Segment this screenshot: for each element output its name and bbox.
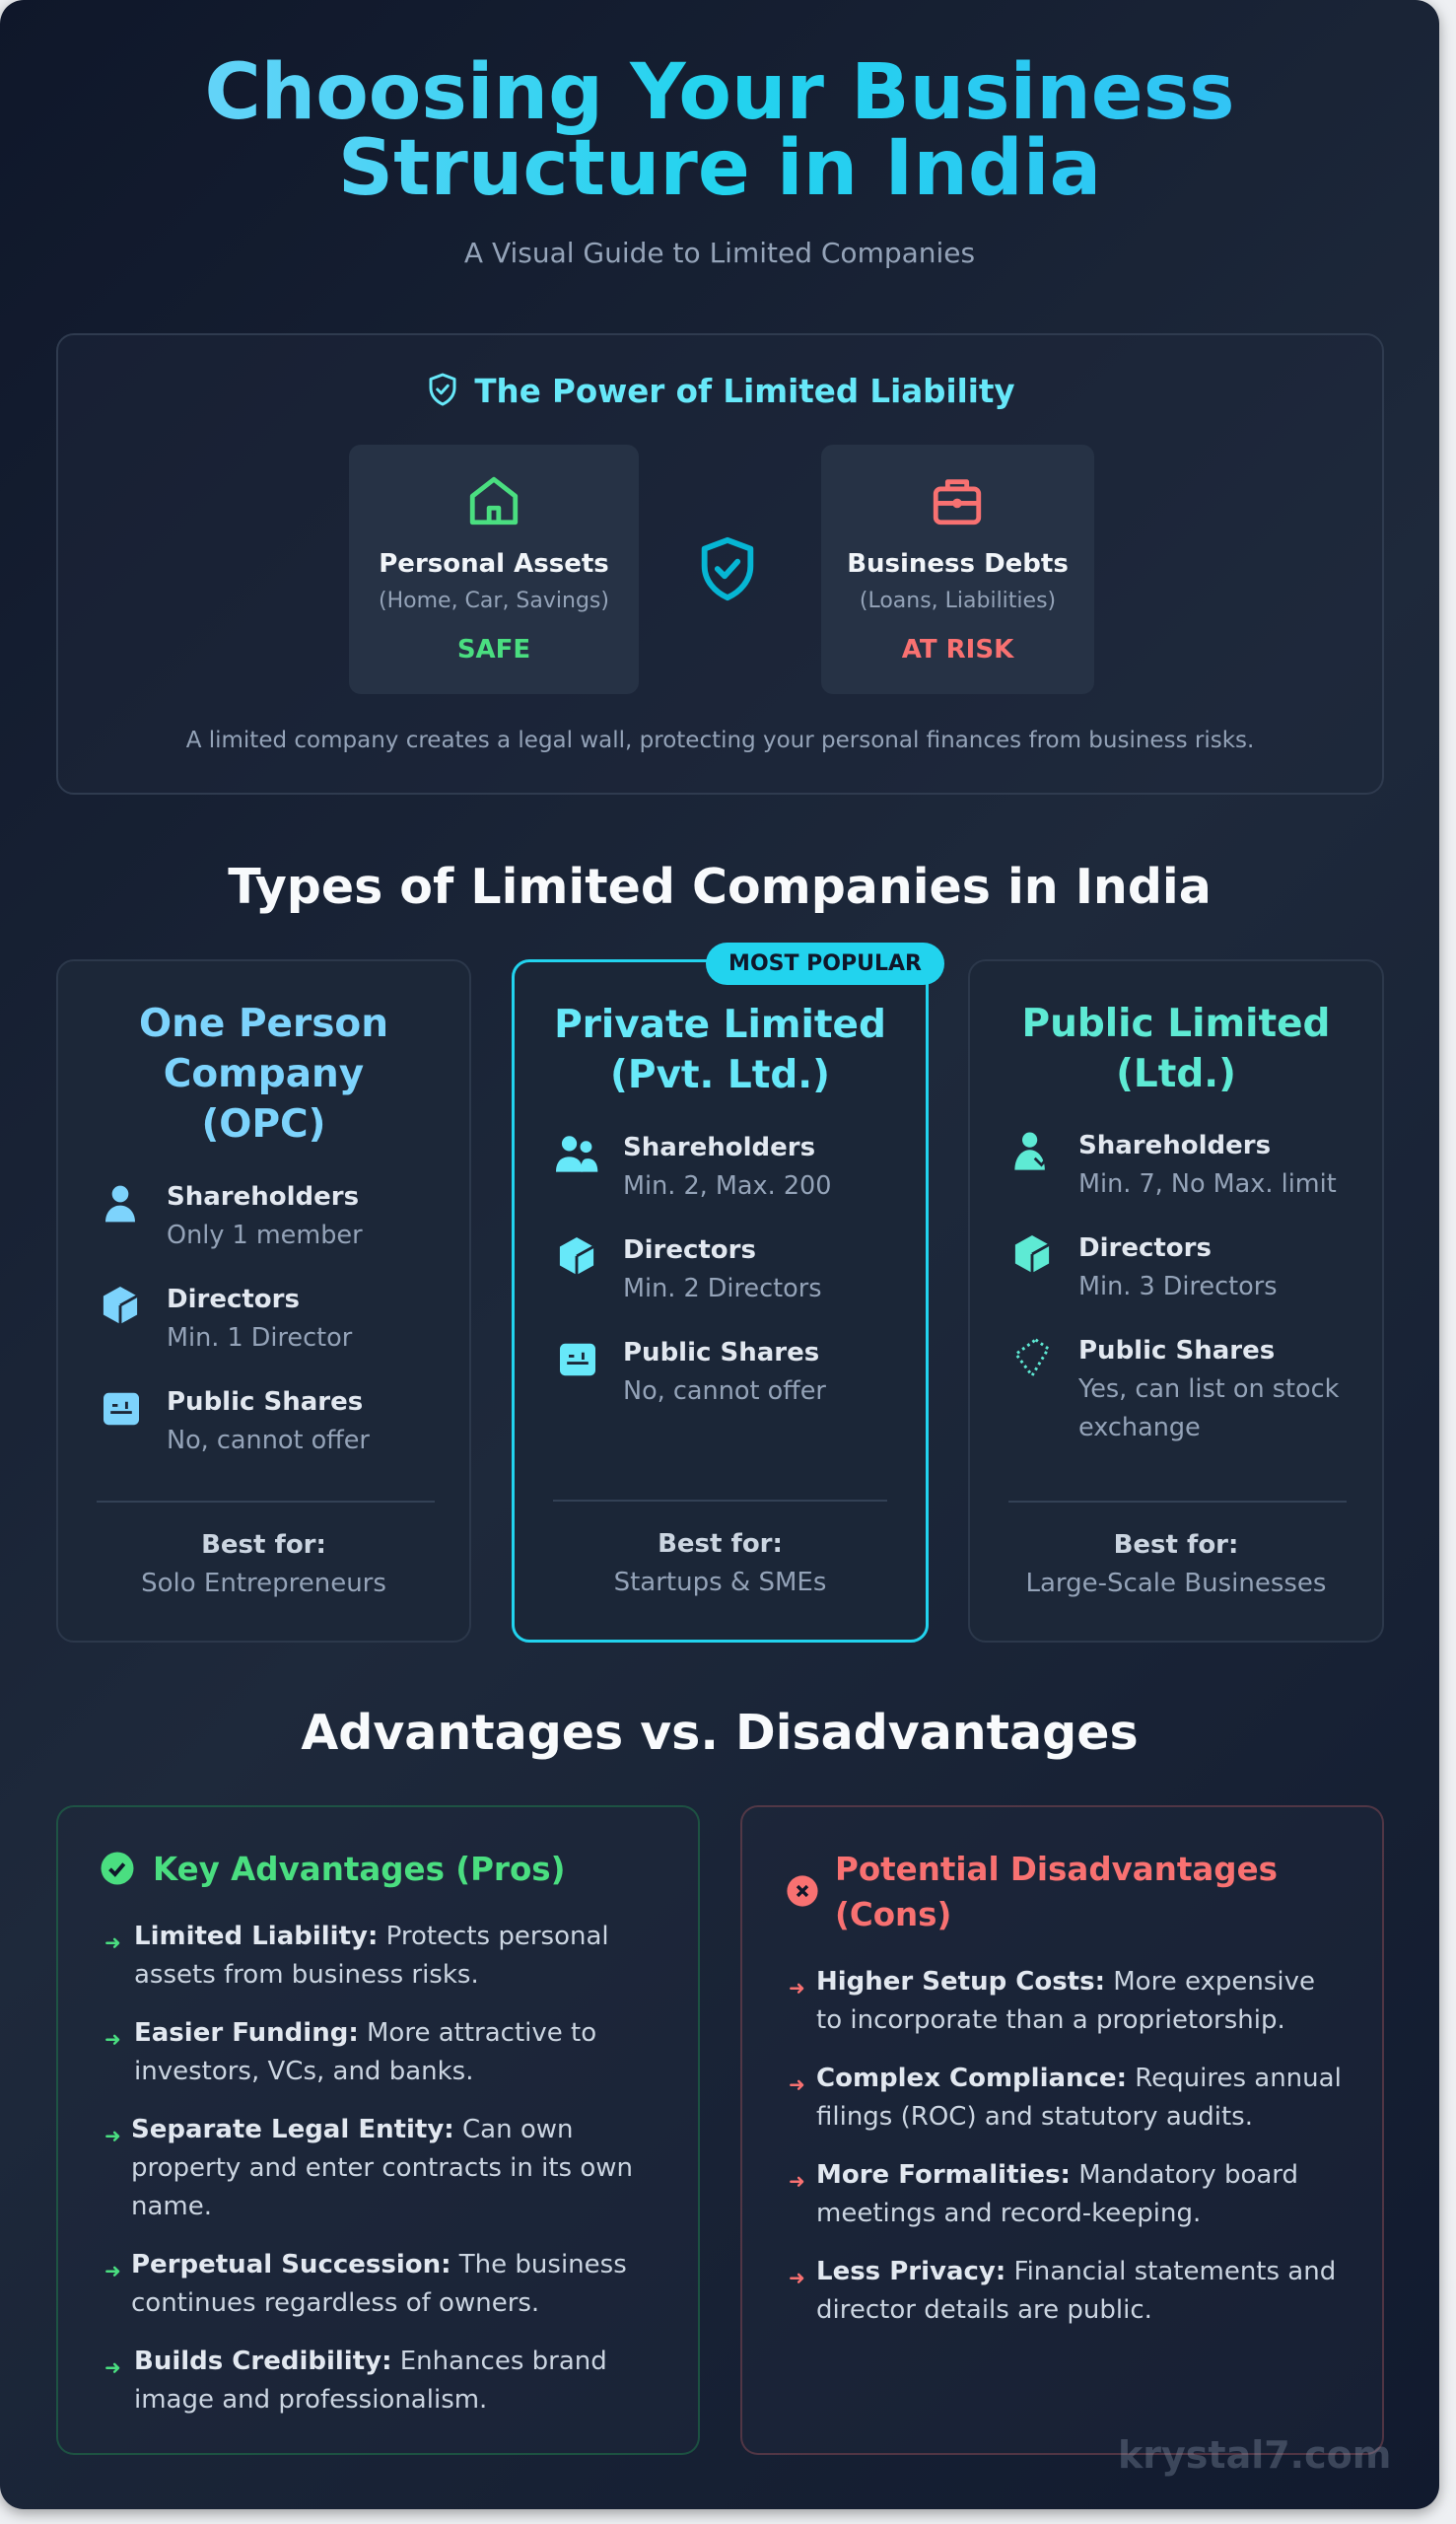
panel: limited liability bbox=[56, 333, 1384, 795]
panel: cons: ➜ bbox=[789, 2266, 805, 2289]
heading: types: Types of Limited Companies in India bbox=[228, 859, 1212, 915]
item: shareholders: Shareholders bbox=[1078, 1131, 1271, 1160]
panel: cons: ➜ bbox=[789, 2072, 805, 2096]
best for: Best for: bbox=[201, 1530, 326, 1560]
heading: pros: Key Advantages (Pros) bbox=[153, 1851, 566, 1888]
icon: briefcase bbox=[933, 479, 982, 525]
panel: pros: ➜ bbox=[104, 2259, 121, 2282]
best for bbox=[141, 1530, 386, 1598]
item: directors: Directors bbox=[1078, 1233, 1212, 1263]
item: directors: Min. 1 Director bbox=[167, 1323, 352, 1353]
title: Structure in India bbox=[338, 124, 1101, 213]
item: shareholders: Only 1 member bbox=[167, 1221, 363, 1250]
item: directors: Min. 2 Directors bbox=[623, 1274, 822, 1303]
caption: A limited company creates a legal wall, protecting your personal finances from business risks. bbox=[186, 728, 1254, 753]
card: Private Limited: Private Limited bbox=[554, 1003, 886, 1047]
title: Choosing Your Business bbox=[204, 48, 1235, 137]
best for bbox=[1026, 1530, 1326, 1598]
panel: pros bbox=[56, 1805, 700, 2455]
best for: Startups & SMEs bbox=[614, 1568, 826, 1597]
item: public shares: No, cannot offer bbox=[623, 1376, 826, 1406]
best for: Solo Entrepreneurs bbox=[141, 1569, 386, 1598]
card: Private Limited: (Pvt. Ltd.) bbox=[610, 1053, 830, 1097]
item: public shares: Yes, can list on stock exchange bbox=[1078, 1374, 1339, 1442]
item: shareholders: Min. 7, No Max. limit bbox=[1078, 1169, 1337, 1199]
item: directors bbox=[1015, 1233, 1278, 1301]
title bbox=[0, 55, 1439, 207]
badge: most popular: MOST POPULAR bbox=[728, 951, 922, 976]
best for: Large-Scale Businesses bbox=[1026, 1569, 1326, 1598]
item: shareholders: Min. 2, Max. 200 bbox=[623, 1171, 832, 1201]
card: OPC: (OPC) bbox=[201, 1102, 325, 1147]
panel: pros: ➜ bbox=[104, 1930, 121, 1954]
heading: power of limited liability: The Power of Limited Liability bbox=[474, 373, 1015, 410]
panel: pros: ➜ bbox=[104, 2355, 121, 2379]
item: public shares: Public Shares bbox=[1078, 1336, 1275, 1366]
subtitle: A Visual Guide to Limited Companies bbox=[464, 237, 975, 269]
item: shareholders bbox=[105, 1182, 363, 1250]
best for: Best for: bbox=[658, 1529, 783, 1559]
card: OPC: One Person bbox=[139, 1002, 388, 1046]
item: public shares bbox=[560, 1338, 826, 1406]
list: cons bbox=[789, 1967, 1342, 2325]
heading: cons bbox=[787, 1851, 1278, 1933]
box: personal assets: Personal Assets bbox=[379, 549, 609, 579]
item: directors: Directors bbox=[623, 1235, 756, 1265]
list: cons: Complex Compliance: Requires annual filings (ROC) and statutory audits. bbox=[816, 2064, 1342, 2132]
item: shareholders bbox=[556, 1133, 832, 1201]
list: cons: Higher Setup Costs: More expensive to incorporate than a proprietorship. bbox=[816, 1967, 1315, 2035]
card: OPC: Company bbox=[164, 1052, 364, 1096]
item: directors: Min. 3 Directors bbox=[1078, 1272, 1278, 1301]
item: directors bbox=[103, 1285, 353, 1353]
card: Public Limited bbox=[968, 959, 1384, 1643]
list: pros: Separate Legal Entity: Can own property and enter contracts in its own name. bbox=[131, 2115, 633, 2221]
list: cons: Less Privacy: Financial statements and director details are public. bbox=[816, 2257, 1336, 2325]
panel: pros: ➜ bbox=[104, 2124, 121, 2147]
panel: pros: ➜ bbox=[104, 2027, 121, 2051]
card: Public Limited: Public Limited bbox=[1022, 1002, 1330, 1046]
box: business debts: Business Debts bbox=[847, 549, 1069, 579]
box: business debts: AT RISK bbox=[902, 635, 1013, 665]
badge: most popular bbox=[706, 943, 944, 985]
item: public shares bbox=[104, 1387, 370, 1455]
list: pros bbox=[104, 1922, 633, 2415]
item: shareholders bbox=[1014, 1131, 1337, 1199]
card: Public Limited: (Ltd.) bbox=[1116, 1052, 1236, 1096]
icon: shield center bbox=[702, 536, 753, 601]
card: OPC bbox=[56, 959, 471, 1643]
list: cons: More Formalities: Mandatory board meetings and record-keeping. bbox=[816, 2160, 1298, 2228]
box: personal assets: SAFE bbox=[457, 635, 530, 665]
heading: cons: (Cons) bbox=[835, 1896, 951, 1933]
panel: cons bbox=[740, 1805, 1384, 2455]
item: shareholders: Shareholders bbox=[623, 1133, 815, 1162]
item: directors: Directors bbox=[167, 1285, 300, 1314]
heading: cons: Potential Disadvantages bbox=[835, 1851, 1278, 1888]
item: public shares: Public Shares bbox=[623, 1338, 819, 1367]
box: business debts: (Loans, Liabilities) bbox=[860, 589, 1056, 613]
list: pros: Builds Credibility: Enhances brand image and professionalism. bbox=[134, 2347, 607, 2415]
item: directors bbox=[560, 1235, 822, 1303]
watermark: krystal7.com bbox=[1118, 2433, 1391, 2477]
item: shareholders: Shareholders bbox=[167, 1182, 359, 1212]
list: pros: Easier Funding: More attractive to investors, VCs, and banks. bbox=[134, 2018, 596, 2086]
item: public shares bbox=[1015, 1336, 1339, 1442]
heading: advantages vs disadvantages: Advantages vs. Disadvantages bbox=[301, 1705, 1139, 1761]
card: Private Limited bbox=[512, 959, 929, 1643]
best for bbox=[614, 1529, 826, 1597]
box: business debts bbox=[821, 445, 1094, 694]
item: public shares: Public Shares bbox=[167, 1387, 363, 1417]
box: personal assets: (Home, Car, Savings) bbox=[379, 589, 609, 613]
panel: cons: ➜ bbox=[789, 1976, 805, 1999]
best for: Best for: bbox=[1114, 1530, 1238, 1560]
box: personal assets bbox=[349, 445, 639, 694]
item: public shares: No, cannot offer bbox=[167, 1426, 370, 1455]
panel: cons: ➜ bbox=[789, 2169, 805, 2193]
list: pros: Limited Liability: Protects personal assets from business risks. bbox=[134, 1922, 609, 1990]
list: pros: Perpetual Succession: The business continues regardless of owners. bbox=[131, 2250, 627, 2318]
icon: house bbox=[469, 477, 519, 525]
